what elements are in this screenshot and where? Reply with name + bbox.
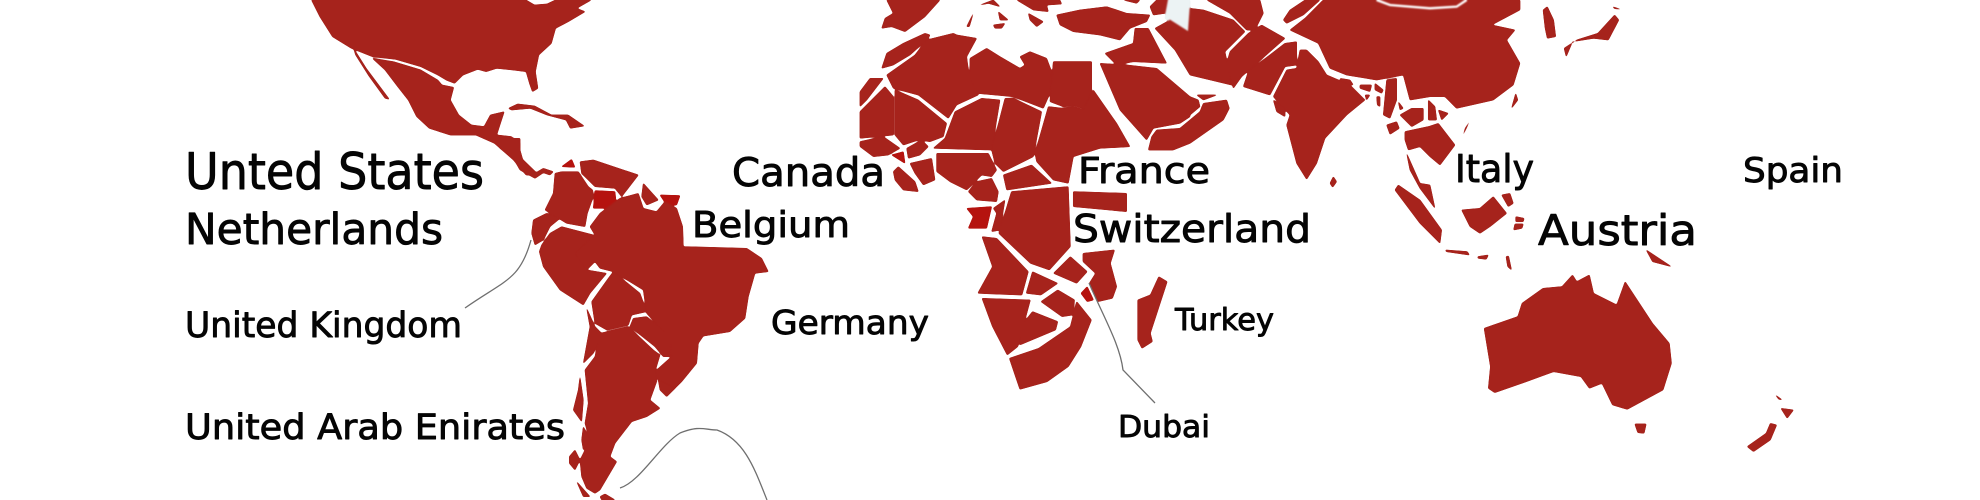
label: Dubai: Dubai [1118,410,1210,445]
Australia [1484,275,1671,409]
label: Switzerland: Switzerland [1073,207,1311,251]
label: Belgium: Belgium [692,205,850,246]
world map: all land masses [311,0,1794,500]
label: United States: Unted States [185,143,484,201]
label: Turkey: Turkey [1174,303,1274,338]
label: Italy: Italy [1455,147,1534,191]
map: Oceania and east Asian islands [1445,7,1794,452]
label: United Arab Enirates: United Arab Enirates [185,408,565,448]
map: central and southern Africa [978,187,1167,389]
label: Spain: Spain [1743,151,1843,191]
map: Europe islands and north Africa [860,0,1245,232]
border: white line across northern Asia [1377,0,1467,8]
map: South America [500,138,768,388]
map: North and Central America [311,0,591,175]
map: southern cone of South America [569,327,675,500]
label: United Kingdom: United Kingdom [185,306,462,346]
leader line: United Kingdom [465,240,531,308]
label: Canada: Canada [732,151,885,196]
leader line: United Arab Emirates [620,428,767,500]
label: Germany: Germany [771,303,929,342]
label: France: France [1078,151,1210,192]
map: Arabia, Asia and Southeast Asia [1148,0,1520,243]
label: Netherlands: Netherlands [185,205,443,255]
label: Austria: Austria [1538,206,1697,255]
leader line: Dubai [1089,283,1155,403]
